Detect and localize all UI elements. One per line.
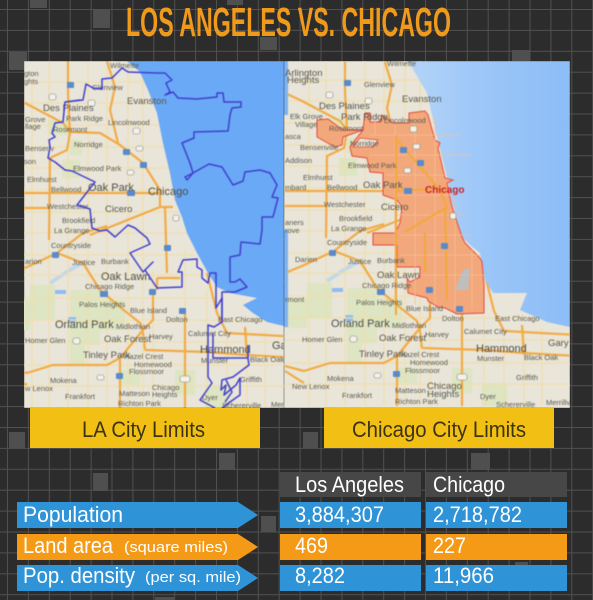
value: LA population xyxy=(280,502,421,528)
map labels: LA panel: Bellwood xyxy=(51,185,81,194)
table column header: Los Angeles: Los Angeles xyxy=(295,472,404,497)
row label arrow: Land area: (square miles) xyxy=(124,539,228,556)
table column header: Chicago: Chicago xyxy=(433,472,505,497)
map labels: LA panel: ghts xyxy=(24,77,38,86)
map labels: Chicago panel: Park Ridge xyxy=(341,112,388,123)
map labels: Chicago panel: Westchester xyxy=(324,200,366,209)
map labels: LA panel: Elmhurst xyxy=(27,175,58,184)
map labels: LA panel: w Lenox xyxy=(24,384,53,393)
map labels: LA panel: Homer Glen xyxy=(25,336,65,345)
map labels: LA panel: Matteson xyxy=(119,389,150,398)
value: Chicago density: 11,966 xyxy=(433,563,494,588)
map labels: Chicago panel: Burbank xyxy=(377,256,405,265)
map labels: LA panel: Lincolnwood xyxy=(108,118,150,127)
map labels: LA panel: Tinley Park xyxy=(83,350,130,361)
table column header: Chicago xyxy=(426,472,567,497)
map labels: Chicago panel: Frankfort xyxy=(342,391,373,400)
map labels: Chicago panel: Justice xyxy=(348,257,371,266)
map labels: Chicago panel: Oak Forest xyxy=(379,333,426,344)
map labels: LA panel: Oak Park xyxy=(88,182,134,194)
map labels: LA panel: Flossmoor xyxy=(129,367,165,376)
map labels: Chicago panel: Des Plaines xyxy=(319,101,370,112)
value: Chicago population: 2,718,782 xyxy=(433,502,522,527)
map labels: LA panel: Des Plaines xyxy=(43,103,94,114)
map labels: Chicago panel: Brookfield xyxy=(339,214,372,223)
caption: Chicago City Limits: Chicago City Limits xyxy=(352,417,526,442)
map labels: Chicago panel: Oak Lawn xyxy=(377,270,420,281)
map labels: LA panel: Orland Park xyxy=(55,319,114,331)
map labels: Chicago panel: Merrillv xyxy=(546,398,570,407)
map labels: Chicago panel: Matteson xyxy=(395,386,426,395)
map labels: Chicago panel: Palos Heights xyxy=(356,298,403,307)
map labels: Chicago panel: New Lenox xyxy=(292,382,330,391)
map labels: LA panel: Palos Heights xyxy=(79,300,126,309)
map labels: LA panel: Burbank xyxy=(101,257,129,266)
map labels: Chicago panel: mbard xyxy=(285,183,306,192)
caption: Chicago City Limits xyxy=(324,408,554,448)
map labels: Chicago panel: Schererville xyxy=(496,400,535,409)
map labels: LA panel xyxy=(24,61,291,410)
map labels: Chicago panel: Gary xyxy=(548,338,569,349)
value: LA population: 3,884,307 xyxy=(295,502,384,527)
map labels: Chicago panel: Calumet City xyxy=(464,327,507,336)
row label arrow: Population: Population xyxy=(23,502,123,527)
row label arrow: Land area: Land area xyxy=(23,533,114,558)
value: LA density xyxy=(280,563,421,591)
map labels: Chicago panel: Heights xyxy=(287,75,319,86)
map labels: LA panel: Justice xyxy=(72,258,95,267)
map labels: Chicago panel: Chicago xyxy=(425,185,464,196)
map labels: LA panel: Chicago Ridge xyxy=(85,282,134,291)
map labels: LA panel: Rosemont xyxy=(53,125,88,134)
map labels: LA panel: son xyxy=(24,157,36,166)
map labels: Chicago panel: Chicago xyxy=(427,381,462,392)
map labels: Chicago panel: Black Oak xyxy=(524,353,558,362)
map labels: Chicago panel: asca xyxy=(285,132,302,141)
map labels: LA panel: Griffith xyxy=(240,375,262,384)
map labels: LA panel: Black Oak xyxy=(250,355,284,364)
value: LA land area: 469 xyxy=(295,533,328,558)
map labels: Chicago panel: Elk Grove xyxy=(290,112,323,121)
map labels: Chicago panel: Oak Park xyxy=(363,180,403,191)
map labels: LA panel: Mokena xyxy=(50,376,78,385)
Chicago city area xyxy=(317,111,485,315)
map labels: LA panel: Countryside xyxy=(51,241,91,250)
map labels: Chicago panel: Village xyxy=(295,120,317,129)
map labels: LA panel: llage xyxy=(25,122,41,131)
map labels: LA panel: Elmwood Park xyxy=(73,164,122,173)
map labels: Chicago panel: Glenview xyxy=(364,80,395,89)
map labels: LA panel: gton xyxy=(24,69,39,78)
map labels: Chicago panel: Dyer xyxy=(480,392,496,401)
map labels: Chicago panel: Blue Island xyxy=(406,304,443,313)
map labels: LA panel: Heights xyxy=(152,390,178,399)
map labels: LA panel: Park Ridge xyxy=(66,114,103,123)
map labels: LA panel: Chicago xyxy=(152,383,180,392)
map labels: Chicago panel: Bensenville xyxy=(300,143,338,152)
value: Chicago land area: 227 xyxy=(433,533,466,558)
panel: LA city limits map xyxy=(24,61,284,408)
map labels: Chicago panel: Orland Park xyxy=(331,318,390,330)
map labels: LA panel: Oak Forest xyxy=(104,334,151,345)
map labels: Chicago panel: Harvey xyxy=(425,330,449,339)
map labels: LA panel: Wilmette xyxy=(110,61,139,70)
map labels: LA panel: Frankfort xyxy=(65,392,96,401)
map labels: Chicago panel: Norridge xyxy=(350,139,379,148)
map labels: Chicago panel: Hazel Crest xyxy=(400,350,440,359)
map labels: Chicago panel: Homer Glen xyxy=(302,335,342,344)
map labels: LA panel: Hammond xyxy=(200,344,251,356)
value: LA density: 8,282 xyxy=(295,563,345,588)
map labels: LA panel: Munster xyxy=(201,356,229,365)
value: LA land area xyxy=(280,533,421,560)
map labels: LA panel: Blue Island xyxy=(130,306,167,315)
map labels: Chicago panel: rmont xyxy=(285,295,305,304)
map labels: LA panel: Harvey xyxy=(149,332,173,341)
map labels: LA panel: La Grange xyxy=(54,226,89,235)
map labels: Chicago panel: Elmwood Park xyxy=(348,161,397,170)
panel: Chicago city limits map xyxy=(284,59,577,409)
map labels: Chicago panel: Countryside xyxy=(327,238,367,247)
map labels: Chicago panel: La Grange xyxy=(331,224,366,233)
map labels: Chicago panel: Munster xyxy=(477,354,505,363)
map labels: LA panel: arion xyxy=(25,257,42,266)
row label arrow: Pop. density xyxy=(17,563,258,591)
map labels: LA panel: Glenview xyxy=(92,83,123,92)
map labels: Chicago panel: Griffith xyxy=(516,373,538,382)
map labels: LA panel: Dolton xyxy=(166,315,188,324)
map labels: LA panel: Oak Lawn xyxy=(101,271,151,283)
map labels: LA panel: Westchester xyxy=(47,202,89,211)
map labels: Chicago panel: Hammond xyxy=(476,343,527,355)
value: Chicago land area xyxy=(426,533,567,560)
map labels: Chicago panel: Flossmoor xyxy=(405,366,441,375)
value: Chicago density xyxy=(426,563,567,591)
caption: LA City Limits: LA City Limits xyxy=(82,417,205,442)
map labels: Chicago panel: Heights xyxy=(427,389,459,400)
row label arrow: Pop. density: Pop. density xyxy=(23,563,135,588)
map labels: Chicago panel: Wilmette xyxy=(387,59,416,68)
map labels: LA panel: Richton Park xyxy=(118,399,161,408)
map labels: Chicago panel: Cicero xyxy=(381,202,408,213)
map labels: LA panel: Grove xyxy=(25,115,45,124)
map labels: Chicago panel: Darien xyxy=(295,255,317,264)
map labels: Chicago panel: aners xyxy=(285,218,304,227)
map labels: LA panel: Dyer xyxy=(202,393,218,402)
map labels: LA panel: Norridge xyxy=(74,140,103,149)
map labels: Chicago panel: Bellwood xyxy=(327,183,357,192)
map labels: LA panel: Homewood xyxy=(134,360,172,369)
row label arrow: Population xyxy=(17,502,258,528)
map labels: LA panel: Merr xyxy=(271,400,287,409)
map labels: LA panel: Brookfield xyxy=(62,216,95,225)
row label arrow: Land area xyxy=(17,533,258,560)
map labels: LA panel: Calumet City xyxy=(188,329,231,338)
map labels: LA panel: Chicago xyxy=(148,186,188,198)
map labels: Chicago panel: Dolton xyxy=(442,314,464,323)
map labels: Chicago panel: Addison xyxy=(285,156,312,165)
map labels: Chicago panel: Evanston xyxy=(402,94,442,105)
map labels: LA panel: Schererville xyxy=(222,401,261,410)
map labels: Chicago panel: Elmhurst xyxy=(303,173,334,182)
map labels: Chicago panel: rove xyxy=(285,226,300,235)
map labels: LA panel: Evanston xyxy=(127,96,167,107)
caption: LA City Limits xyxy=(30,408,260,448)
map labels: LA panel: Gar xyxy=(272,340,291,352)
row label arrow: Pop. density: (per sq. mile) xyxy=(145,569,241,586)
map labels: Chicago panel: Homewood xyxy=(410,358,448,367)
map labels: LA panel: Cicero xyxy=(105,204,132,215)
map labels: Chicago panel: Mokena xyxy=(327,374,355,383)
map labels: Chicago panel: Midlothian xyxy=(392,321,426,330)
map labels: LA panel: Midlothian xyxy=(116,322,150,331)
map labels: LA panel: East Chicago xyxy=(218,315,263,324)
map labels: LA panel: Hazel Crest xyxy=(124,352,164,361)
LA boundary outline xyxy=(48,68,278,408)
map labels: Chicago panel: Arlington xyxy=(285,68,322,79)
map labels: Chicago panel: Tinley Park xyxy=(359,349,406,360)
map labels: Chicago panel: Lincolnwood xyxy=(384,116,426,125)
map labels: Chicago panel: Chicago Ridge xyxy=(362,281,411,290)
map labels: LA panel: Bensenv xyxy=(25,144,54,153)
value: Chicago population xyxy=(426,502,567,528)
map labels: Chicago panel: Richton Park xyxy=(395,397,438,406)
map labels: Chicago panel: Rosemont xyxy=(329,124,364,133)
map labels: Chicago panel: East Chicago xyxy=(495,314,540,323)
map labels: Chicago panel xyxy=(285,59,570,409)
